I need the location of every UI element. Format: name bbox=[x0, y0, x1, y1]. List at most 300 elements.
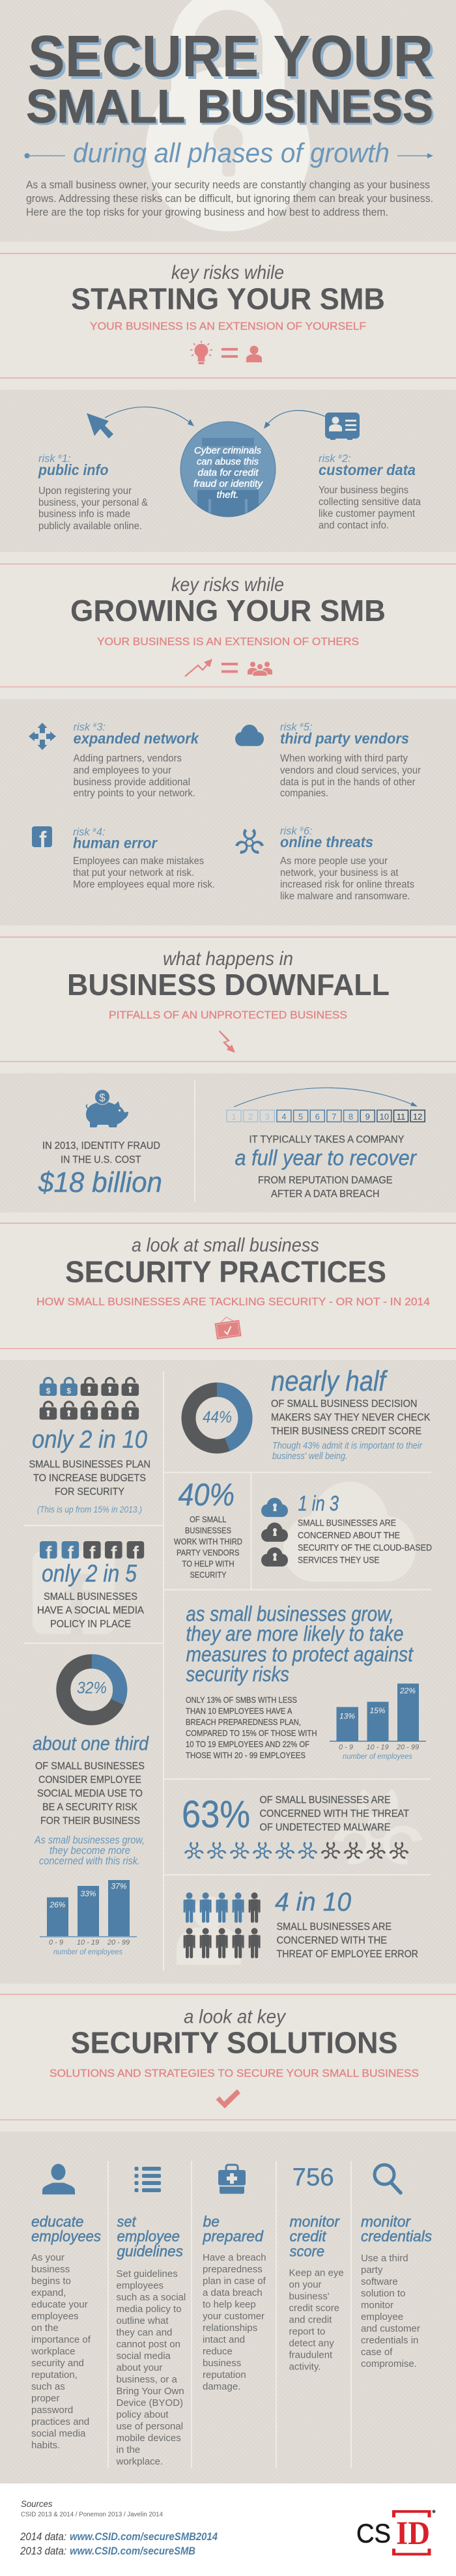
column: be prepared: reputation bbox=[203, 2369, 246, 2381]
footer: sources and links: 2014 data: bbox=[20, 2530, 66, 2543]
column: monitor credentials bbox=[361, 2165, 432, 2369]
footer: sources and links bbox=[20, 2498, 218, 2557]
column: monitor credit score bbox=[289, 2164, 344, 2372]
icon: list bbox=[134, 2167, 161, 2192]
title: SMALL BUSINESS bbox=[28, 83, 435, 135]
stat: as small businesses grow: measures to protect against bbox=[186, 1642, 414, 1666]
stat: nearly half: THEIR BUSINESS CREDIT SCORE bbox=[271, 1426, 421, 1437]
stat: as small businesses grow: THOSE WITH 20 - 99 EMPLOYEES bbox=[186, 1750, 306, 1760]
stat: 63% malware: OF UNDETECTED MALWARE bbox=[259, 1822, 391, 1833]
logo: CSID bbox=[356, 2510, 435, 2556]
icon: social badges row: f bbox=[68, 1542, 74, 1563]
column: be prepared: business bbox=[203, 2358, 241, 2369]
icon: social media badge bbox=[32, 826, 52, 852]
column: set employee guidelines: Device (BYOD) bbox=[116, 2397, 183, 2409]
text: risk 2 customer data bbox=[319, 453, 421, 531]
logo: CSID: CS bbox=[356, 2518, 391, 2548]
stat: budgets 2 in 10: (This is up from 15% in 2013.) bbox=[37, 1504, 142, 1514]
chart: 32% donut bbox=[63, 1662, 120, 1718]
text: risk 3 expanded network: expanded network bbox=[73, 730, 199, 747]
stat: 4 in 10 employee error: CONCERNED WITH THE bbox=[276, 1935, 387, 1946]
stat: as small businesses grow: 10 TO 19 EMPLOYEES AND 22% OF bbox=[186, 1739, 309, 1749]
footer: sources and links: www.CSID.com/secureSMB2014 bbox=[70, 2530, 218, 2543]
text: risk 4 human error: Employees can make mistakes bbox=[73, 856, 204, 867]
column: set employee guidelines: Set guidelines bbox=[116, 2268, 178, 2279]
column: be prepared: relationships bbox=[203, 2323, 257, 2334]
column: be prepared: Have a breach bbox=[203, 2252, 266, 2263]
chart: breach plan by employees: 20 - 99 bbox=[396, 1744, 419, 1752]
column: educate employees: reputation, bbox=[31, 2369, 78, 2381]
column: monitor credentials: compromise. bbox=[361, 2358, 417, 2369]
column: set employee guidelines: about your bbox=[116, 2362, 162, 2373]
column: monitor credit score: and credit bbox=[289, 2315, 332, 2325]
stat: budgets 2 in 10: SMALL BUSINESSES PLAN bbox=[29, 1459, 150, 1470]
text: risk 4 human error: that put your network at risk. bbox=[73, 867, 194, 878]
icon: social badges row: f bbox=[111, 1542, 117, 1563]
stat: about one third: SOCIAL MEDIA USE TO bbox=[37, 1788, 143, 1799]
chart: breach plan by employees: 15% bbox=[369, 1706, 386, 1715]
logo: CSID: ID bbox=[396, 2515, 430, 2552]
column: set employee guidelines: mobile devices bbox=[116, 2433, 181, 2444]
chart: social media risk by employees: 0 - 9 bbox=[49, 1939, 63, 1946]
text: risk 3 expanded network: and employees to your bbox=[73, 765, 171, 776]
column: be prepared: to help keep bbox=[203, 2299, 256, 2310]
section heading: growing your SMB: GROWING YOUR SMB bbox=[70, 594, 386, 628]
column: educate employees: proper bbox=[31, 2393, 59, 2404]
column: educate employees: password bbox=[31, 2405, 73, 2416]
stat: as small businesses grow: BREACH PREPAREDNESS PLAN, bbox=[186, 1717, 301, 1727]
text: risk 4 human error: # bbox=[93, 827, 96, 834]
stat: 63% malware bbox=[182, 1789, 425, 1868]
column: monitor credit score: detect any bbox=[289, 2338, 334, 2349]
icon: faint cloud bbox=[283, 1482, 416, 1582]
icon: faint social badge bbox=[33, 1550, 115, 1653]
column: be prepared bbox=[202, 2165, 266, 2392]
column: set employee guidelines: employees bbox=[116, 2280, 164, 2291]
section heading: security practices: a look at small business bbox=[132, 1234, 319, 1256]
panel: risks 1 and 2 bbox=[38, 407, 421, 532]
text: risk 1 public info: public info bbox=[38, 461, 108, 478]
column: be prepared: reduce bbox=[203, 2346, 233, 2357]
column: educate employees: workplace bbox=[31, 2346, 76, 2357]
column: monitor credit score: business' bbox=[289, 2291, 330, 2302]
panel: security solutions bbox=[31, 2161, 432, 2468]
column: set employee guidelines: set bbox=[117, 2213, 137, 2230]
text: recovery time: IT TYPICALLY TAKES A COMPANY bbox=[249, 1134, 404, 1146]
column: educate employees: on the bbox=[31, 2323, 59, 2334]
section heading: business downfall: BUSINESS DOWNFALL bbox=[67, 968, 390, 1002]
stat: social media policy 2 in 5: HAVE A SOCIAL MEDIA bbox=[37, 1605, 145, 1616]
stat: nearly half: business' well being. bbox=[272, 1451, 348, 1462]
calendar months: 2 bbox=[248, 1112, 253, 1122]
chart: 44% donut: 44% bbox=[203, 1408, 232, 1426]
icon: customer id card bbox=[325, 412, 360, 440]
stat: social media policy 2 in 5: POLICY IN PLACE bbox=[50, 1619, 131, 1630]
stat: nearly half: OF SMALL BUSINESS DECISION bbox=[271, 1398, 417, 1410]
stat: as small businesses grow: COMPARED TO 15% OF THOSE WITH bbox=[186, 1728, 317, 1738]
panel: security practices stats bbox=[24, 1365, 432, 1971]
stat: budgets 2 in 10: FOR SECURITY bbox=[55, 1486, 124, 1498]
text: risk 5 third party vendors: companies. bbox=[280, 788, 328, 799]
icon: growth equals people bbox=[185, 659, 272, 676]
chart: breach plan by employees: 10 - 19 bbox=[366, 1744, 389, 1752]
section heading: security solutions: SOLUTIONS AND STRATEGIES TO SECURE YOUR SMALL BUSINESS bbox=[50, 2067, 419, 2079]
text: risk 6 online threats: network, your business is at bbox=[280, 867, 399, 878]
column: monitor credit score: credit bbox=[289, 2227, 327, 2244]
stat: social media policy 2 in 5: SMALL BUSINESSES bbox=[44, 1591, 137, 1602]
text: risk 6 online threats: As more people use your bbox=[280, 856, 388, 867]
icon: hanging checklist bbox=[214, 1316, 242, 1340]
text: risk 1 public info: business info is made bbox=[38, 508, 130, 520]
column: educate employees: habits. bbox=[31, 2440, 60, 2451]
chart: social media risk by employees: 26% bbox=[49, 1900, 66, 1909]
column: monitor credentials: credentials bbox=[361, 2227, 432, 2244]
calendar months: 9 bbox=[365, 1112, 370, 1122]
column: monitor credentials: case of bbox=[361, 2347, 393, 2358]
text: risk 2 customer data: customer data bbox=[319, 461, 416, 478]
arrow: year arc bbox=[234, 1088, 418, 1107]
column: educate employees: employees bbox=[31, 2227, 101, 2244]
text: risk 6 online threats: risk bbox=[280, 825, 297, 837]
footer: sources and links: www.CSID.com/secureSMB bbox=[70, 2545, 195, 2557]
column: set employee guidelines: they can and bbox=[116, 2327, 172, 2338]
stat: 1 in 3 cloud services: SERVICES THEY USE bbox=[298, 1555, 379, 1565]
calendar months: 10 bbox=[380, 1112, 389, 1122]
column: monitor credentials: monitor bbox=[361, 2213, 411, 2230]
column: set employee guidelines: in the bbox=[116, 2444, 140, 2455]
section heading: starting your SMB: YOUR BUSINESS IS AN EXTENSION OF YOURSELF bbox=[90, 320, 366, 332]
column: be prepared: prepared bbox=[202, 2227, 264, 2244]
panel: risks 3 to 6 bbox=[29, 721, 421, 902]
stat: 40% third party vendors: TO HELP WITH bbox=[182, 1559, 235, 1569]
text: risk 1 public info: Upon registering your bbox=[38, 485, 132, 497]
calendar months: 6 bbox=[315, 1112, 320, 1122]
icon: three padlock clouds bbox=[261, 1498, 288, 1567]
icon: faint biohazard bbox=[330, 1789, 425, 1868]
icon: social badges row bbox=[40, 1541, 144, 1563]
section heading: business downfall bbox=[0, 937, 456, 1062]
stat: 40% third party vendors: BUSINESSES bbox=[185, 1526, 231, 1535]
callout: cyber criminals circle: Cyber criminals bbox=[194, 446, 261, 456]
text: recovery time: AFTER A DATA BREACH bbox=[271, 1189, 379, 1200]
stat: 1 in 3 cloud services: SMALL BUSINESSES ARE bbox=[298, 1517, 396, 1527]
column: monitor credit score: report to bbox=[289, 2326, 325, 2337]
chart: social media risk by employees: number of employees bbox=[53, 1947, 122, 1956]
title bbox=[26, 24, 436, 135]
icon: medical kit bbox=[218, 2165, 246, 2193]
section heading: security practices bbox=[0, 1223, 456, 1349]
column: educate employees: practices and bbox=[31, 2416, 89, 2427]
footer: sources and links: 2013 data: bbox=[20, 2545, 66, 2557]
column: monitor credit score: on your bbox=[289, 2279, 322, 2290]
stat: about one third: about one third bbox=[33, 1733, 149, 1754]
section heading: business downfall: what happens in bbox=[163, 948, 293, 970]
column: set employee guidelines: use of personal bbox=[116, 2421, 183, 2432]
section heading: starting your SMB: STARTING YOUR SMB bbox=[71, 282, 385, 315]
dividers bbox=[24, 1371, 431, 1971]
stat: as small businesses grow: as small businesses grow, bbox=[186, 1602, 394, 1625]
section heading: growing your SMB: YOUR BUSINESS IS AN EXTENSION OF OTHERS bbox=[97, 635, 359, 648]
stat: nearly half: MAKERS SAY THEY NEVER CHECK bbox=[271, 1412, 431, 1423]
column: educate employees: importance of bbox=[31, 2334, 91, 2345]
calendar months: 4 bbox=[281, 1112, 287, 1122]
icon: faint person bbox=[177, 1896, 241, 1965]
title: SECURE YOUR bbox=[28, 24, 433, 89]
text: risk 6 online threats bbox=[280, 825, 414, 902]
icon: magnifier bbox=[375, 2165, 401, 2193]
stat: 4 in 10 employee error: SMALL BUSINESSES ARE bbox=[276, 1921, 392, 1933]
section heading: security solutions: a look at key bbox=[184, 2006, 287, 2028]
icon: cloud bbox=[235, 725, 264, 746]
column: be prepared: plan in case of bbox=[203, 2276, 266, 2287]
text: risk 6 online threats: # bbox=[300, 826, 304, 833]
stat: social media policy 2 in 5: only 2 in 5 bbox=[42, 1560, 137, 1587]
column: set employee guidelines: social media bbox=[116, 2351, 171, 2362]
text: risk 2 customer data: collecting sensitive data bbox=[319, 497, 421, 508]
stat: budgets 2 in 10 bbox=[29, 1378, 150, 1514]
column: educate employees: educate your bbox=[31, 2299, 88, 2310]
icon: person bbox=[42, 2164, 75, 2195]
column: educate employees: business bbox=[31, 2264, 70, 2275]
stat: as small businesses grow: ONLY 13% OF SMBS WITH LESS bbox=[186, 1695, 297, 1705]
text: fraud cost: IN THE U.S. COST bbox=[61, 1155, 141, 1165]
column: educate employees: social media bbox=[31, 2428, 86, 2439]
column: educate employees bbox=[31, 2164, 101, 2451]
column: set employee guidelines: cannot post on bbox=[116, 2339, 180, 2350]
text: risk 1 public info: # bbox=[58, 454, 62, 461]
stat: 1 in 3 cloud services: CONCERNED ABOUT THE bbox=[298, 1530, 400, 1541]
text: recovery time bbox=[235, 1134, 418, 1200]
section heading: security solutions bbox=[0, 1994, 456, 2120]
column: set employee guidelines: outline what bbox=[116, 2315, 169, 2326]
text: risk 5 third party vendors: third party vendors bbox=[280, 730, 409, 747]
icon: padlock rows: $ bbox=[66, 1387, 71, 1396]
stat: about one third: As small businesses grow, bbox=[34, 1834, 145, 1846]
column: monitor credit score: fraudulent bbox=[289, 2350, 333, 2360]
intro paragraph: grows. Addressing these risks can be difficult, but ignoring them can break your business. bbox=[26, 193, 433, 205]
stat: about one third: they become more bbox=[50, 1844, 130, 1857]
column: monitor credentials: party bbox=[361, 2265, 383, 2276]
text: risk 1 public info: business, your personal & bbox=[38, 497, 149, 508]
text: risk 3 expanded network: business provide additional bbox=[73, 777, 190, 788]
text: risk 3 expanded network: risk bbox=[73, 721, 90, 733]
text: risk 2 customer data: 2: bbox=[341, 453, 351, 465]
stat: 63% malware: CONCERNED WITH THE THREAT bbox=[259, 1808, 409, 1819]
column: educate employees: As your bbox=[31, 2252, 64, 2263]
stat: about one third: BE A SECURITY RISK bbox=[42, 1802, 138, 1813]
icon: falling arrow bbox=[219, 1030, 235, 1053]
column: educate employees: begins to bbox=[31, 2276, 71, 2287]
section heading: growing your SMB bbox=[0, 564, 456, 687]
column: monitor credit score: score bbox=[289, 2243, 324, 2260]
icon: padlock rows bbox=[40, 1378, 139, 1419]
chart: breach plan by employees bbox=[330, 1684, 426, 1761]
stat: about one third: concerned with this risk. bbox=[39, 1855, 140, 1867]
text: risk 6 online threats: like malware and ransomware. bbox=[280, 891, 410, 902]
stat: 1 in 3 cloud services: SECURITY OF THE CLOUD-BASED bbox=[298, 1542, 432, 1552]
chart: social media risk by employees: 33% bbox=[80, 1889, 96, 1898]
text: recovery time: FROM REPUTATION DAMAGE bbox=[258, 1175, 392, 1186]
text: risk 1 public info bbox=[38, 453, 149, 532]
text: risk 4 human error: 4: bbox=[96, 826, 106, 838]
column: set employee guidelines: employee bbox=[117, 2227, 180, 2244]
column: educate employees: educate bbox=[31, 2213, 83, 2230]
column: educate employees: employees bbox=[31, 2311, 79, 2322]
chart: breach plan by employees: 22% bbox=[399, 1686, 416, 1696]
column: monitor credit score: activity. bbox=[289, 2362, 321, 2372]
text: risk 5 third party vendors: 5: bbox=[304, 721, 313, 733]
column: monitor credentials: software bbox=[361, 2276, 398, 2287]
callout: cyber criminals circle: can abuse this bbox=[197, 457, 259, 467]
text: risk 6 online threats: increased risk for online threats bbox=[280, 879, 414, 890]
callout: cyber criminals circle bbox=[180, 422, 276, 523]
icon: cursor arrow bbox=[87, 413, 113, 439]
footer: sources and links: CSID 2013 & 2014 / Ponemon 2013 / Javelin 2014 bbox=[21, 2511, 163, 2518]
column: monitor credentials: Use a third bbox=[361, 2253, 408, 2264]
text: risk 6 online threats: 6: bbox=[304, 825, 313, 837]
text: risk 6 online threats: online threats bbox=[280, 833, 373, 850]
column: set employee guidelines: business, or a bbox=[116, 2374, 178, 2385]
column: educate employees: expand, bbox=[31, 2287, 66, 2298]
text: fraud cost bbox=[38, 1140, 162, 1198]
stat: as small businesses grow bbox=[186, 1602, 426, 1761]
footer: sources and links: Sources bbox=[21, 2498, 52, 2509]
column: monitor credentials: credentials in bbox=[361, 2335, 418, 2346]
column: monitor credentials: employee bbox=[361, 2311, 403, 2323]
icon: check mark bbox=[216, 2089, 240, 2109]
stat: 40% third party vendors: OF SMALL bbox=[190, 1514, 227, 1524]
calendar months: 11 bbox=[397, 1112, 405, 1122]
stat: budgets 2 in 10: only 2 in 10 bbox=[32, 1426, 147, 1453]
column: set employee guidelines: policy about bbox=[116, 2409, 169, 2420]
calendar months: 1 bbox=[231, 1112, 236, 1122]
stat: as small businesses grow: they are more likely to take bbox=[186, 1622, 404, 1645]
text: risk 2 customer data: # bbox=[338, 454, 342, 461]
icon: social badges row: f bbox=[46, 1542, 52, 1563]
stat: 4 in 10 employee error bbox=[177, 1888, 418, 1965]
chart: 44% donut bbox=[189, 1389, 245, 1447]
icon: biohazard bbox=[235, 829, 264, 855]
title: SMALL BUSINESS bbox=[26, 81, 433, 133]
section heading: business downfall: PITFALLS OF AN UNPROTECTED BUSINESS bbox=[109, 1009, 347, 1021]
column: be prepared: your customer bbox=[203, 2311, 264, 2322]
icon: biohazard row bbox=[184, 1842, 409, 1860]
text: risk 3 expanded network: Adding partners, vendors bbox=[73, 753, 182, 764]
text: risk 5 third party vendors: # bbox=[300, 722, 304, 729]
icon: idea equals person bbox=[190, 341, 262, 364]
column: set employee guidelines: media policy to bbox=[116, 2304, 182, 2315]
text: risk 5 third party vendors: When working with third party bbox=[280, 753, 408, 764]
stat: 63% malware: OF SMALL BUSINESSES ARE bbox=[259, 1795, 391, 1806]
icon: social badges row: f bbox=[133, 1542, 139, 1563]
section heading: starting your SMB: key risks while bbox=[171, 262, 284, 283]
calendar months bbox=[227, 1110, 425, 1122]
stat: 40% third party vendors: WORK WITH THIRD bbox=[174, 1537, 242, 1546]
calendar months: 3 bbox=[265, 1112, 270, 1122]
icon: expanding arrows bbox=[29, 723, 56, 750]
column: educate employees: such as bbox=[31, 2381, 65, 2392]
icon: piggy bank bbox=[86, 1090, 128, 1127]
stat: 1 in 3 cloud services bbox=[261, 1482, 432, 1582]
chart: breach plan by employees: 0 - 9 bbox=[339, 1744, 353, 1752]
chart: social media risk by employees bbox=[40, 1880, 137, 1956]
text: risk 4 human error bbox=[73, 826, 215, 890]
text: risk 3 expanded network bbox=[73, 721, 199, 799]
column: monitor credentials: and customer bbox=[361, 2323, 420, 2334]
stat: 40% third party vendors: PARTY VENDORS bbox=[177, 1548, 240, 1557]
stat: as small businesses grow: security risks bbox=[186, 1662, 289, 1686]
column: set employee guidelines: Bring Your Own bbox=[116, 2386, 184, 2397]
stat: nearly half bbox=[189, 1365, 431, 1462]
stat: 40% third party vendors: SECURITY bbox=[190, 1570, 227, 1580]
subtitle with arrow: during all phases of growth bbox=[73, 137, 390, 168]
icon: padlock rows: $ bbox=[46, 1387, 51, 1396]
column: set employee guidelines: guidelines bbox=[117, 2243, 183, 2260]
column: monitor credit score: monitor bbox=[289, 2213, 340, 2230]
stat: nearly half: nearly half bbox=[271, 1365, 388, 1397]
text: risk 1 public info: publicly available online. bbox=[38, 521, 142, 532]
column: set employee guidelines: workplace. bbox=[116, 2456, 163, 2467]
icon: piggy bank: $ bbox=[99, 1092, 106, 1104]
intro paragraph: As a small business owner, your security needs are constantly changing as your business bbox=[26, 179, 430, 191]
stat: social media policy 2 in 5 bbox=[33, 1541, 145, 1653]
calendar months: 7 bbox=[332, 1112, 337, 1122]
section heading: security practices: HOW SMALL BUSINESSES ARE TACKLING SECURITY - OR NOT - IN 2014 bbox=[36, 1295, 430, 1308]
arrow: customer data to circle bbox=[264, 411, 325, 429]
text: risk 5 third party vendors: risk bbox=[280, 721, 297, 733]
icon: employee figures bbox=[184, 1892, 261, 1958]
stat: 63% malware: 63% bbox=[182, 1793, 250, 1836]
chart: breach plan by employees: 13% bbox=[339, 1711, 355, 1720]
calendar months: 5 bbox=[298, 1112, 303, 1122]
stat: 40% third party vendors bbox=[174, 1478, 242, 1580]
column: monitor credentials: solution to bbox=[361, 2288, 405, 2299]
panel: downfall stats bbox=[38, 1080, 425, 1202]
text: risk 1 public info: 1: bbox=[62, 453, 71, 465]
text: fraud cost: IN 2013, IDENTITY FRAUD bbox=[42, 1140, 160, 1151]
stat: about one third: CONSIDER EMPLOYEE bbox=[38, 1774, 141, 1786]
text: risk 5 third party vendors bbox=[280, 721, 421, 799]
icon: background padlock bbox=[146, 0, 310, 231]
text: recovery time: a full year to recover bbox=[235, 1146, 418, 1170]
stat: about one third: FOR THEIR BUSINESS bbox=[40, 1816, 140, 1827]
column: be prepared: be bbox=[203, 2213, 220, 2230]
text: risk 4 human error: risk bbox=[73, 826, 90, 838]
chart: social media risk by employees: 20 - 99 bbox=[107, 1939, 130, 1946]
text: risk 2 customer data: risk bbox=[319, 453, 335, 465]
column: be prepared: a data breach bbox=[203, 2287, 263, 2298]
text: risk 3 expanded network: 3: bbox=[96, 721, 106, 733]
calendar months: 8 bbox=[349, 1112, 353, 1122]
stat: 4 in 10 employee error: THREAT OF EMPLOYEE ERROR bbox=[276, 1948, 418, 1960]
section heading: starting your SMB bbox=[0, 253, 456, 378]
column: be prepared: preparedness bbox=[203, 2264, 263, 2275]
stat: as small businesses grow: THAN 10 EMPLOYEES HAVE A bbox=[186, 1706, 292, 1716]
section heading: security practices: SECURITY PRACTICES bbox=[65, 1255, 386, 1289]
text: risk 5 third party vendors: vendors and cloud services, your bbox=[280, 765, 421, 776]
calendar months: 12 bbox=[413, 1112, 422, 1122]
chart: 32% donut: 32% bbox=[77, 1679, 107, 1697]
column: be prepared: damage. bbox=[203, 2381, 240, 2392]
text: risk 5 third party vendors: data is put in the hands of other bbox=[280, 777, 416, 788]
column: be prepared: intact and bbox=[203, 2334, 245, 2345]
stat: budgets 2 in 10: TO INCREASE BUDGETS bbox=[33, 1473, 146, 1484]
section heading: security solutions: SECURITY SOLUTIONS bbox=[70, 2025, 397, 2059]
callout: cyber criminals circle: data for credit bbox=[198, 468, 259, 478]
column: monitor credit score: Keep an eye bbox=[289, 2268, 344, 2278]
stat: 4 in 10 employee error: 4 in 10 bbox=[275, 1888, 351, 1917]
stat: 40% third party vendors: 40% bbox=[178, 1478, 235, 1512]
